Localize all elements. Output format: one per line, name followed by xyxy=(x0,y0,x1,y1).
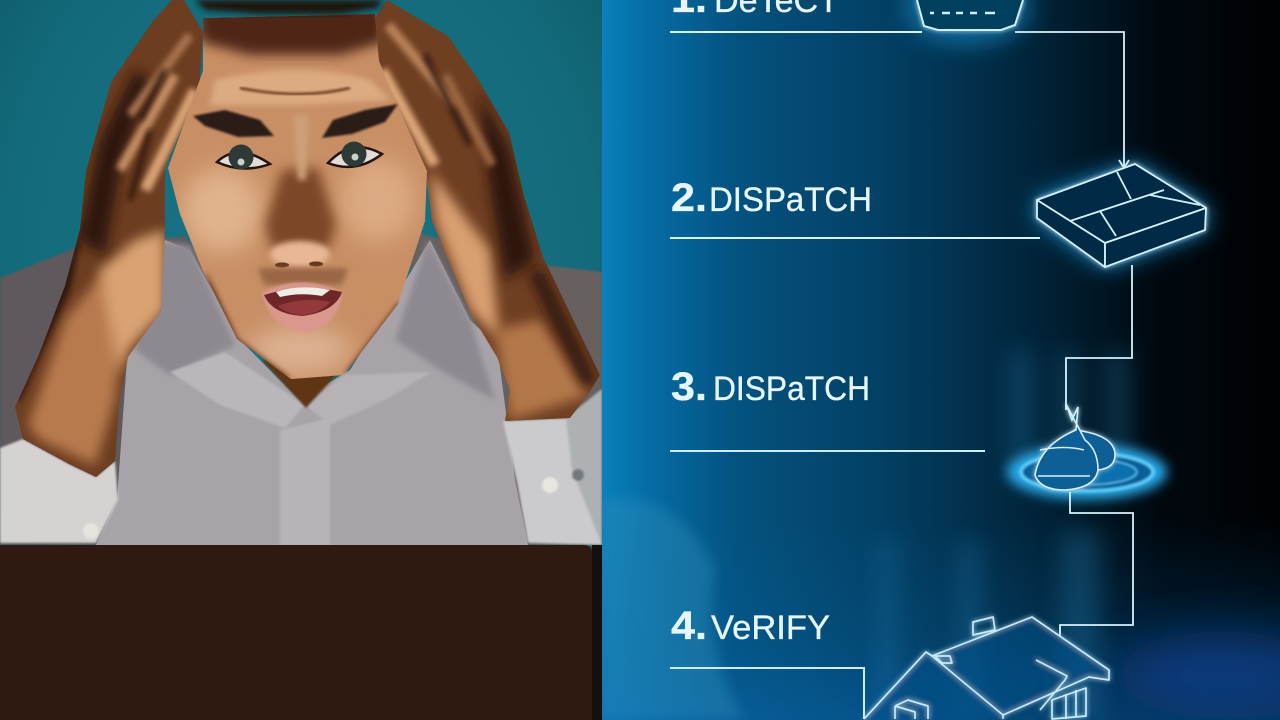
bottom blue glow xyxy=(602,545,1280,720)
left eye xyxy=(217,144,270,170)
left hand and arm xyxy=(15,0,203,477)
step 2 label: DISPaTCH xyxy=(709,181,872,219)
mouth xyxy=(262,282,342,333)
icon: glowing sensor with rings xyxy=(1007,404,1167,499)
step 1 underline xyxy=(670,31,922,33)
left eyebrow xyxy=(193,110,274,137)
icon: dispatch box xyxy=(1037,164,1206,267)
face xyxy=(168,14,427,379)
connector: sensor to step 4 xyxy=(1060,492,1133,636)
panel: response workflow xyxy=(602,0,1280,720)
step 3 label: 3. xyxy=(671,365,707,409)
step 3 label: DISPaTCH xyxy=(713,370,870,408)
face edge shadow xyxy=(205,271,291,379)
step 4 label xyxy=(671,604,830,648)
hair xyxy=(195,0,382,14)
step 2 label: 2. xyxy=(671,176,707,220)
right eye xyxy=(328,142,382,167)
icon: detector device xyxy=(917,0,1023,30)
step 4 label: VeRIFY xyxy=(711,609,830,647)
step 2 underline xyxy=(670,237,1040,239)
lower-left swirl xyxy=(602,499,745,720)
laptop xyxy=(0,545,602,720)
step 4 label: 4. xyxy=(671,604,707,648)
icon: house xyxy=(864,617,1109,719)
photo background xyxy=(0,0,602,552)
shirt front xyxy=(96,240,528,545)
right hand and arm xyxy=(370,0,610,430)
nose shadow xyxy=(265,168,336,250)
cheeks xyxy=(182,168,262,252)
connector: dispatch to step 3 xyxy=(1066,265,1132,410)
step 3 underline xyxy=(670,450,985,452)
right cuff xyxy=(503,389,602,545)
right eyebrow xyxy=(322,104,398,138)
step 3 label xyxy=(672,372,868,401)
panel background xyxy=(602,0,1280,720)
forehead shading xyxy=(203,14,378,64)
shirt shoulders xyxy=(0,232,602,545)
device glows xyxy=(906,0,1206,267)
light streaks xyxy=(880,350,1129,720)
neck xyxy=(262,360,350,408)
step 2 label xyxy=(672,183,870,212)
step 4 underline xyxy=(670,668,864,719)
upper lip shadow xyxy=(258,268,348,285)
left cuff xyxy=(0,439,118,543)
connector: detect to step 2 xyxy=(1015,32,1129,168)
step 1 label xyxy=(674,0,830,12)
photo: stressed man at laptop xyxy=(0,0,610,720)
